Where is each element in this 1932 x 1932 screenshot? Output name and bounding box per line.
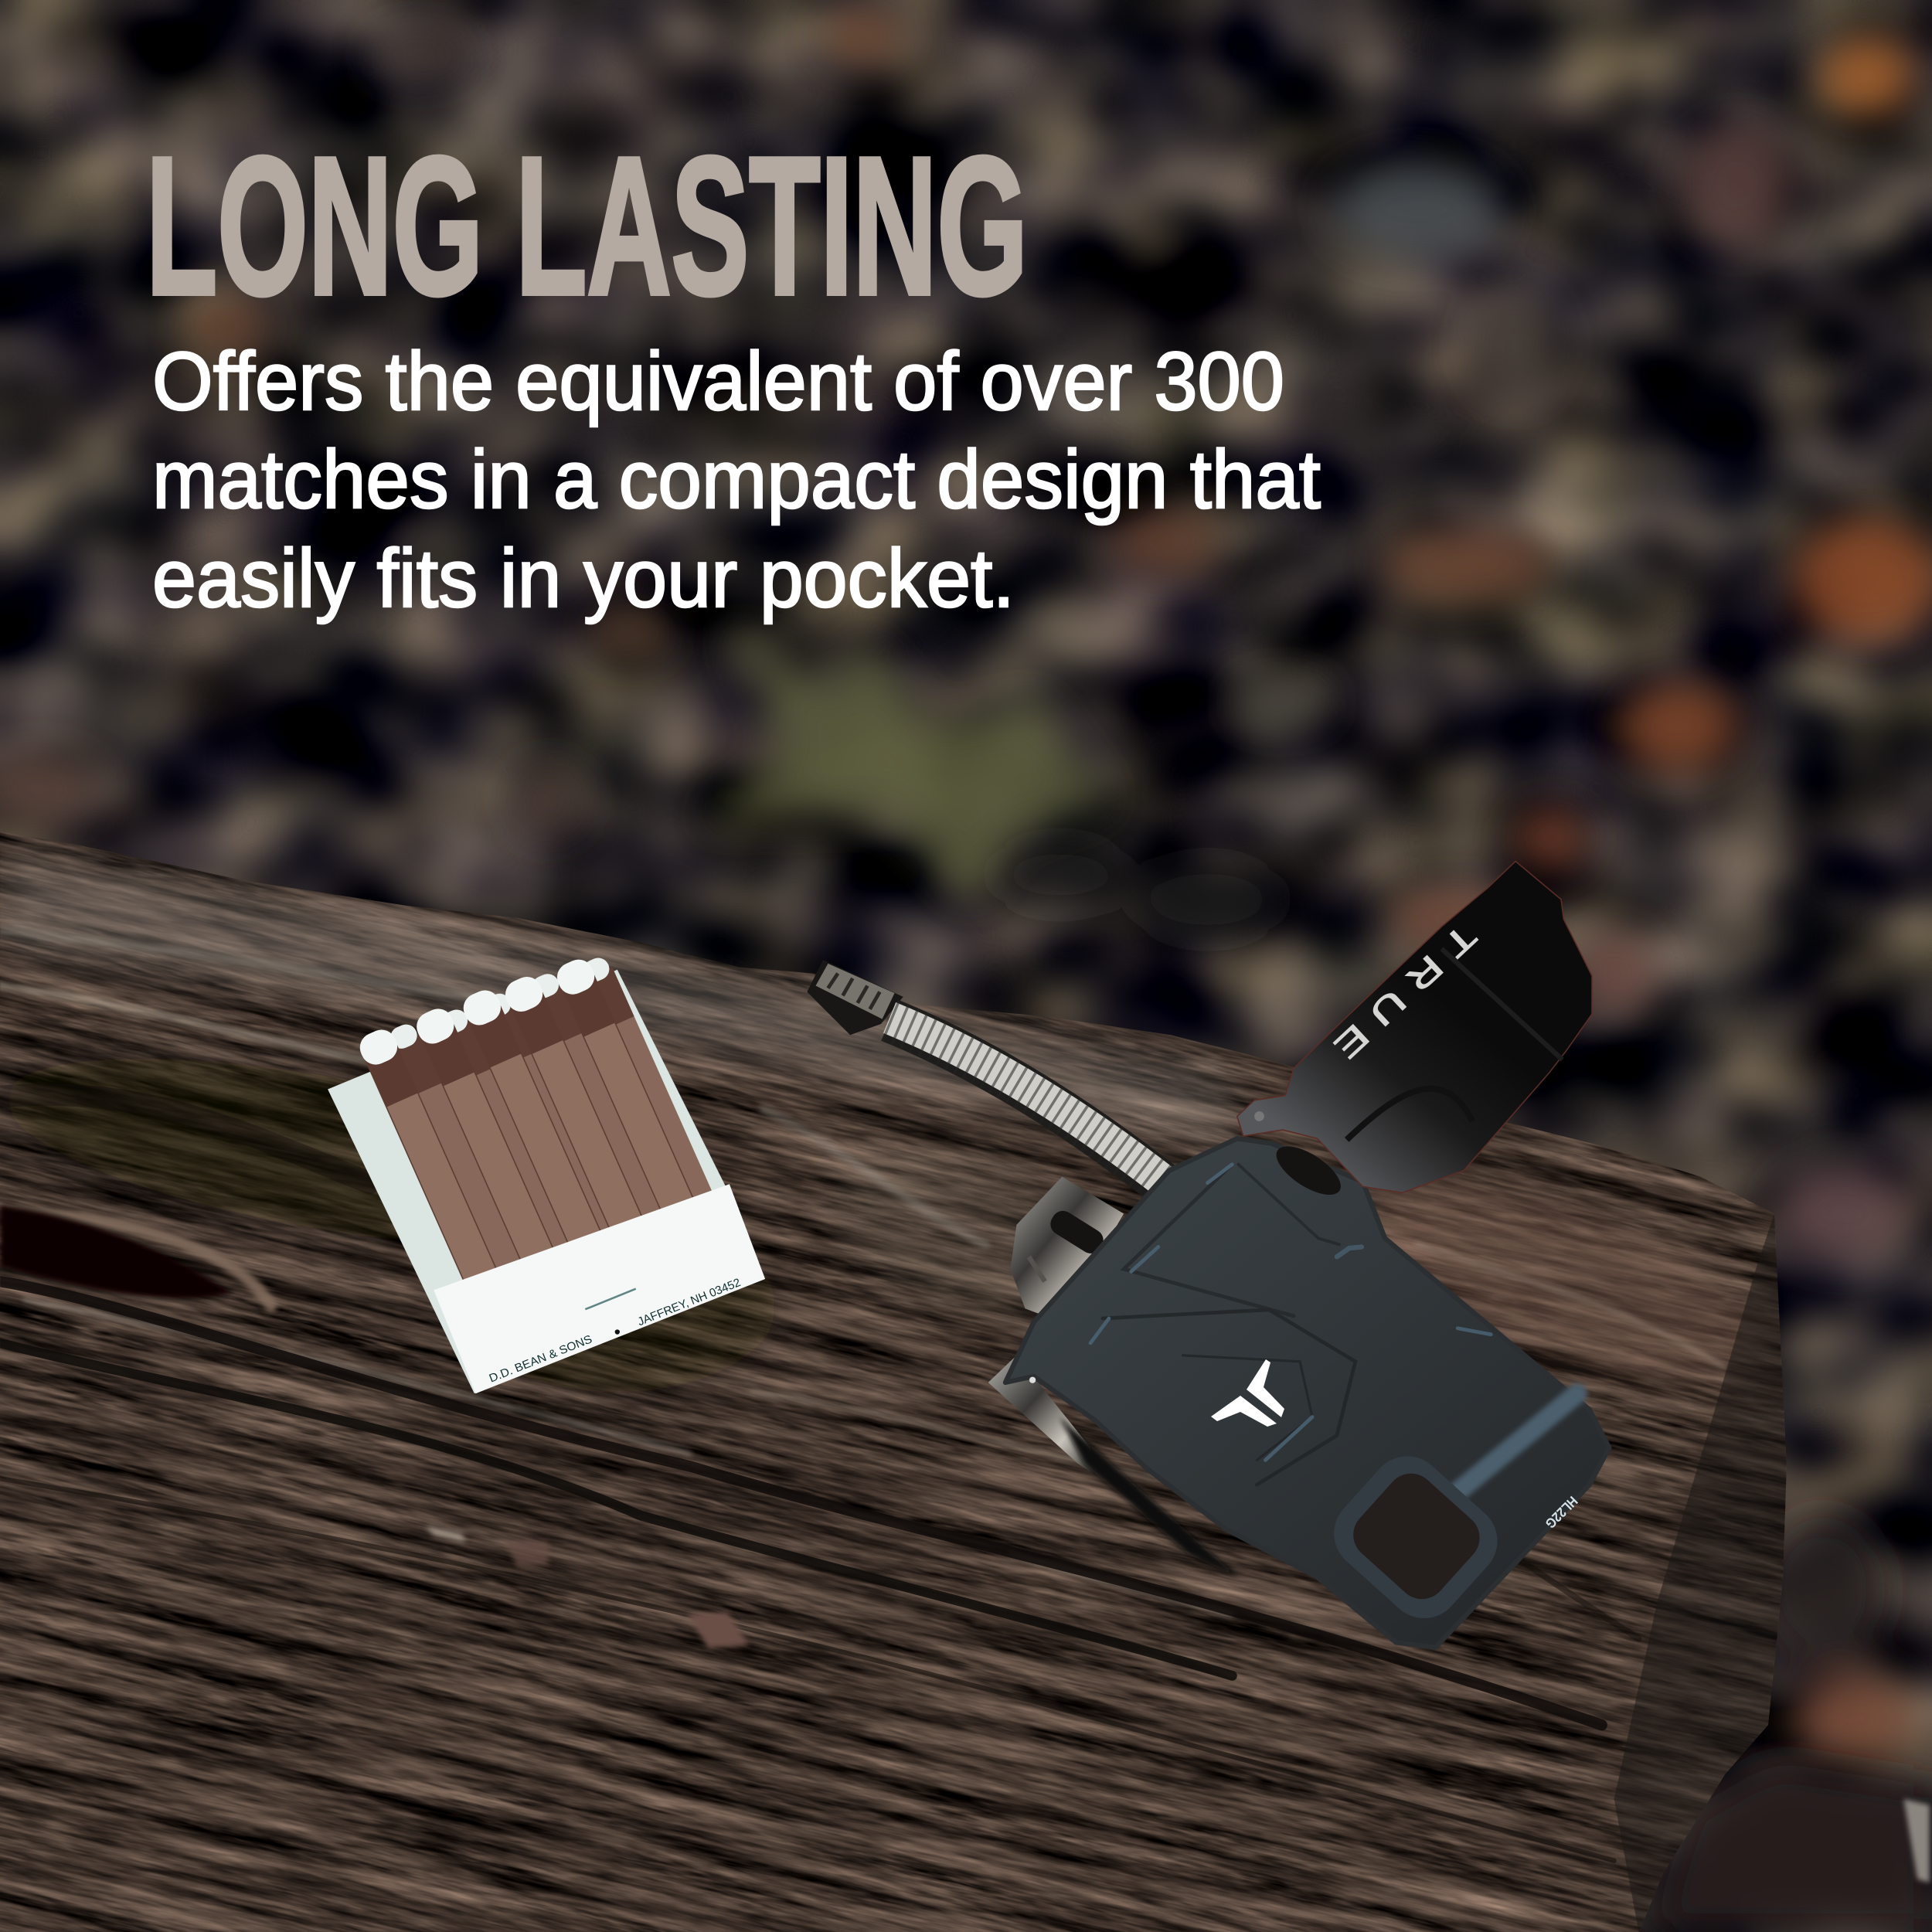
lower right ground [1651,1762,1932,1932]
cap [1237,861,1592,1192]
cap brand text: TRUE [1327,917,1484,1067]
front flap [434,1184,765,1393]
pocket clip shadow [1060,1417,1238,1577]
matchbook [328,954,765,1393]
description text: Offers the equivalent of over 300 [152,335,1284,427]
lighter logo [1211,1359,1284,1427]
moulded panel lines [1090,1165,1491,1485]
matchbook printed text [488,1276,743,1386]
lanyard ring hole [1318,1441,1512,1634]
light wood streaks [0,930,1725,1614]
chrome lower clip [988,1355,1095,1475]
end cap highlight [1453,1393,1577,1496]
gooseneck head [807,960,903,1035]
matches [355,954,721,1325]
model label: HL22G [1543,1493,1580,1532]
description text [152,335,1321,624]
small bark chips [425,1526,749,1648]
lighter [807,960,1609,1648]
matchbook printed text: D.D. BEAN & SONS [488,1332,594,1386]
blurred green leaf [702,628,1109,900]
dark cracks [0,1095,1639,1861]
flexible spring [889,1018,1165,1185]
lighter body [1005,1138,1609,1648]
title: LONG LASTING [146,116,1028,335]
description text: easily fits in your pocket. [152,532,1015,624]
back cover [328,970,740,1393]
chrome usb head [1010,1177,1124,1316]
ring slot [1269,1137,1349,1204]
wooden log [0,720,1787,1932]
log side face [1614,1213,1787,1932]
dark knot hole [0,1205,234,1299]
striker mark [585,1289,636,1309]
matchbook printed text: JAFFREY, NH 03452 [636,1276,743,1328]
pivot dot [1029,1377,1036,1383]
description text: matches in a compact design that [152,433,1321,526]
